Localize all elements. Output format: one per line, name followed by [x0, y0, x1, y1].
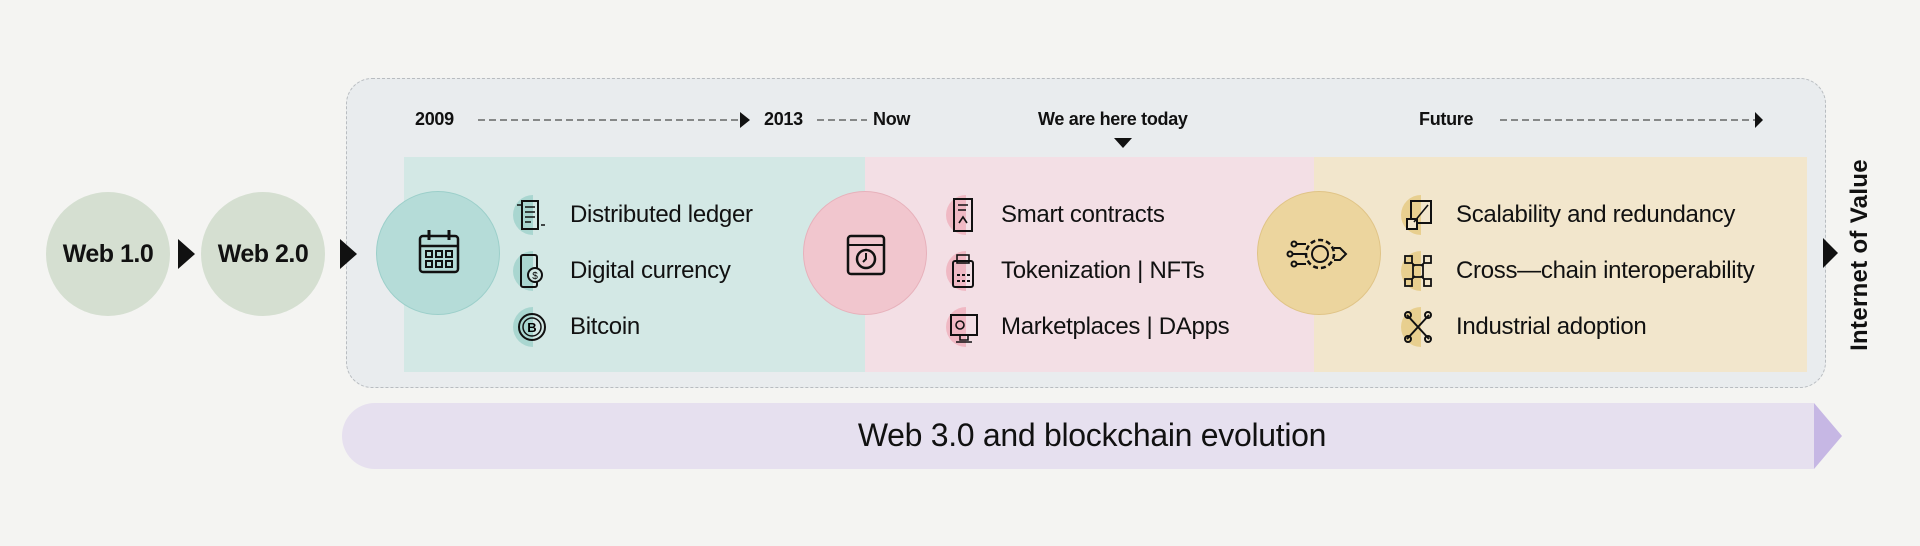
circle: Web 2.0	[201, 192, 325, 316]
panel: web 3.0 container	[346, 78, 1826, 388]
list: pink items	[946, 195, 1229, 347]
icon circle: browser clock	[803, 191, 927, 315]
item: cross-chain	[1401, 251, 1755, 291]
list: teal items	[513, 195, 753, 347]
item: industrial adoption: Industrial adoption	[1456, 313, 1646, 340]
label: Now: Now	[873, 109, 910, 129]
panel: teal	[404, 157, 865, 372]
list: yellow items	[1401, 195, 1755, 347]
item: scalability: Scalability and redundancy	[1456, 201, 1735, 228]
arrow: 1 to 2	[178, 239, 195, 269]
item: smart contracts	[946, 195, 1165, 235]
label: internet of value: Internet of Value	[1846, 159, 1873, 351]
icon circle: calendar	[376, 191, 500, 315]
timeline	[478, 112, 1763, 148]
circle: Web 1.0: Web 1.0	[63, 240, 153, 268]
item: bitcoin: B	[527, 320, 537, 335]
arrow: 2 to 3	[340, 239, 357, 269]
item: bitcoin	[513, 307, 640, 347]
panel: pink	[865, 157, 1314, 372]
item: digital currency	[513, 251, 731, 291]
item: marketplaces: Marketplaces | DApps	[1001, 313, 1229, 340]
bar: web 3.0 and blockchain evolution: Web 3.0 and blockchain evolution	[858, 417, 1326, 453]
label: future: Future	[1419, 109, 1473, 129]
label: 2013: 2013	[764, 109, 803, 129]
item: smart contracts: Smart contracts	[1001, 201, 1165, 228]
panel: yellow	[1314, 157, 1807, 372]
label: we are here today: We are here today	[1038, 109, 1188, 129]
item: bitcoin: Bitcoin	[570, 313, 640, 340]
item: digital currency: Digital currency	[570, 257, 731, 284]
item: cross-chain: Cross—chain interoperability	[1456, 257, 1754, 284]
icon circle: gear	[1257, 191, 1381, 315]
item: tokenization	[946, 251, 1204, 291]
label: 2009: 2009	[415, 109, 454, 129]
item: tokenization: Tokenization | NFTs	[1001, 257, 1204, 284]
circle: Web 2.0: Web 2.0	[218, 240, 308, 268]
item: scalability	[1401, 195, 1736, 235]
bar: web 3.0 and blockchain evolution	[342, 403, 1842, 469]
arrow: to internet of value	[1823, 238, 1838, 268]
circle: Web 1.0	[46, 192, 170, 316]
item: distributed ledger: Distributed ledger	[570, 201, 753, 228]
item: industrial adoption	[1401, 307, 1646, 347]
item: marketplaces	[946, 307, 1229, 347]
item: digital currency: $	[532, 271, 538, 282]
item: distributed ledger	[513, 195, 753, 235]
